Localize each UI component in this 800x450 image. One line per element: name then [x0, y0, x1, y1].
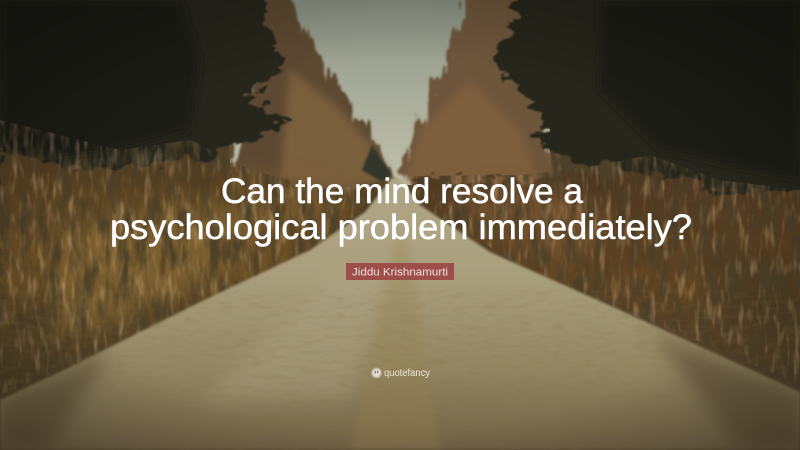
author label: Jiddu Krishnamurti	[352, 266, 448, 278]
road	[0, 178, 800, 450]
distant bare trees right	[400, 0, 560, 200]
dark trees right	[490, 0, 800, 200]
road centre strip	[350, 240, 440, 450]
grass left	[0, 150, 392, 395]
dark conifers at vanishing point	[362, 145, 392, 182]
quotefancy logo	[370, 367, 430, 381]
icon: quote badge: "	[374, 370, 379, 381]
sky	[230, 0, 550, 185]
grass texture	[0, 110, 800, 400]
road bottom shading	[0, 350, 110, 450]
author label	[346, 263, 454, 280]
quote text	[110, 172, 692, 247]
grass right	[410, 172, 800, 385]
dark trees left	[0, 0, 288, 185]
quote text: psychological problem immediately?	[110, 208, 692, 247]
road bright left wheel track	[200, 270, 385, 400]
quote text: Can the mind resolve a	[221, 172, 584, 211]
road texture	[0, 290, 800, 450]
quotefancy logo: quotefancy	[384, 368, 430, 379]
distant bare trees left	[230, 0, 392, 200]
